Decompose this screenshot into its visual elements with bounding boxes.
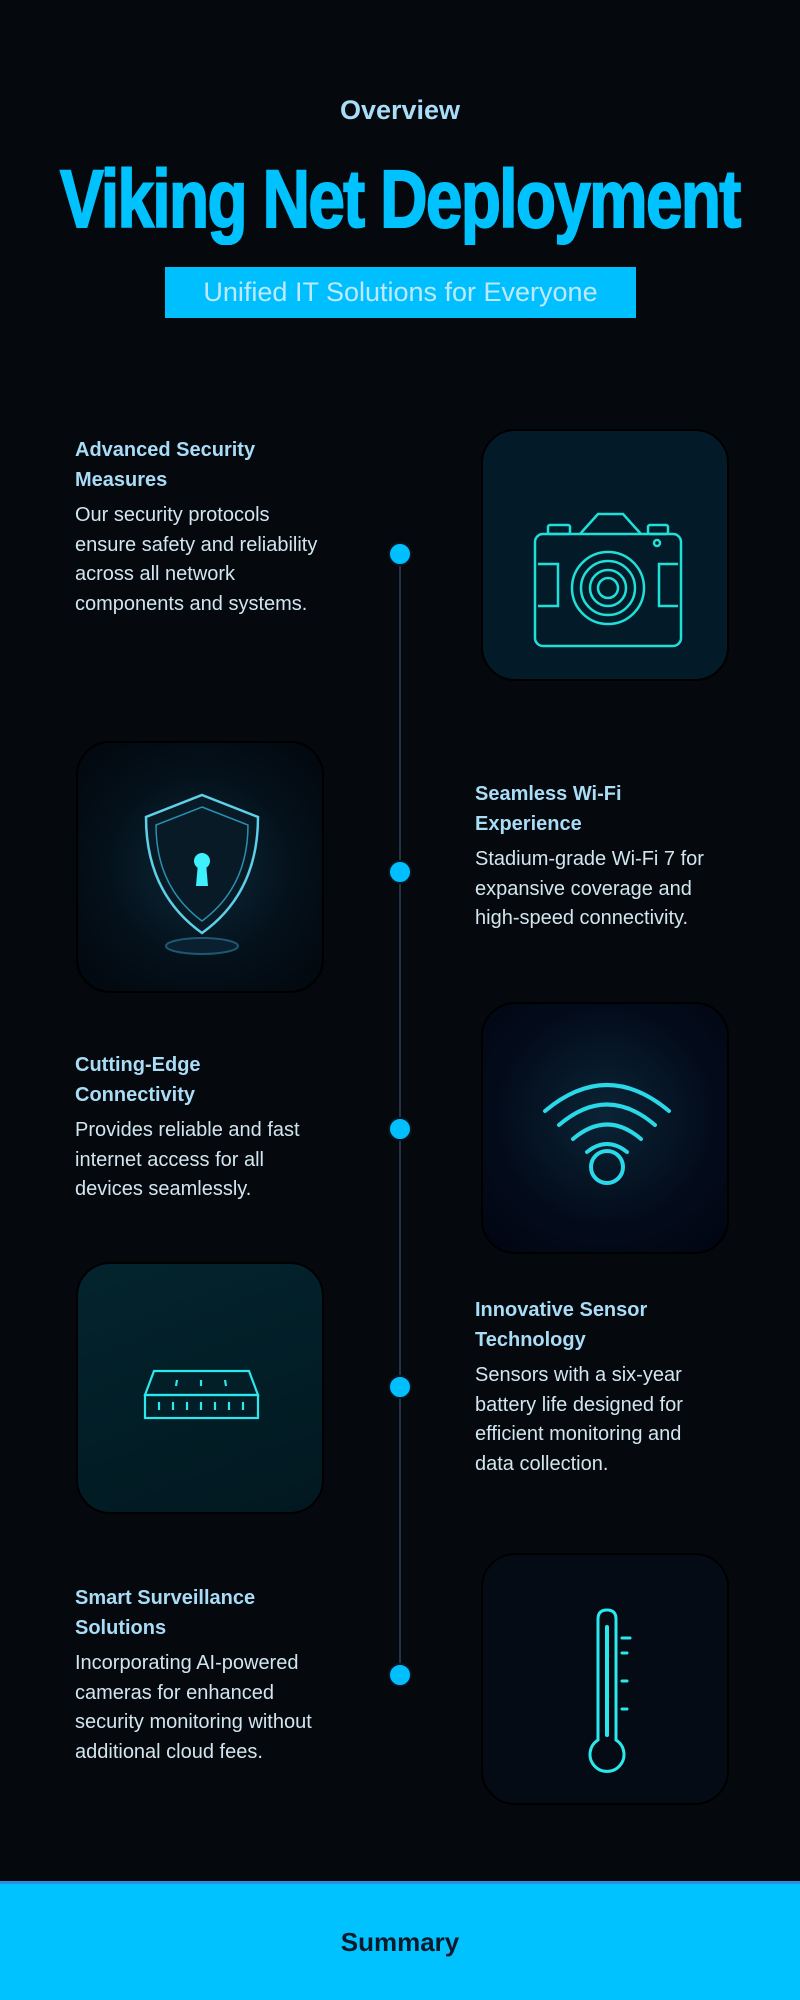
item 3 text: Cutting-Edge Connectivity: internet access for all (75, 1148, 264, 1170)
card: wifi icon (481, 1002, 729, 1254)
item 5 text: Smart Surveillance Solutions: Smart Surveillance (75, 1587, 255, 1609)
item 1 text: Advanced Security Measures: across all network (75, 563, 235, 585)
item 2 text: Seamless Wi-Fi Experience: expansive coverage and (475, 878, 692, 900)
footer summary bar (0, 1881, 800, 2000)
item 4 text: Innovative Sensor Technology: Sensors with a six-year (475, 1364, 682, 1386)
item 3 text: Cutting-Edge Connectivity: devices seamlessly. (75, 1178, 251, 1200)
item 2 text: Seamless Wi-Fi Experience: Seamless Wi-Fi (475, 783, 622, 805)
item 2 text: Seamless Wi-Fi Experience: Stadium-grade Wi-Fi 7 for (475, 848, 704, 870)
item 2 text: Seamless Wi-Fi Experience: high-speed connectivity. (475, 907, 688, 929)
item 4 text: Innovative Sensor Technology: Technology (475, 1329, 586, 1351)
title: Viking Net Deployment (60, 154, 740, 245)
item 5 text: Smart Surveillance Solutions: Solutions (75, 1617, 166, 1639)
item 5 text: Smart Surveillance Solutions: Incorporating AI-powered (75, 1652, 298, 1674)
item 4 text: Innovative Sensor Technology: data collection. (475, 1452, 608, 1474)
item 3 text: Cutting-Edge Connectivity (75, 1054, 300, 1200)
timeline line (399, 554, 401, 1675)
item 4 text: Innovative Sensor Technology: Innovative Sensor (475, 1299, 647, 1321)
card: thermometer icon (481, 1553, 729, 1805)
overview label: Overview (340, 95, 460, 125)
item 3 text: Cutting-Edge Connectivity: Provides reliable and fast (75, 1119, 300, 1141)
subtitle banner: Unified IT Solutions for Everyone (203, 277, 598, 307)
item 4 text: Innovative Sensor Technology: efficient monitoring and (475, 1423, 681, 1445)
card: shield lock icon (76, 741, 324, 993)
item 5 text: Smart Surveillance Solutions: additional cloud fees. (75, 1740, 263, 1762)
footer summary bar: Summary (341, 1927, 459, 1957)
item 1 text: Advanced Security Measures: components and systems. (75, 592, 307, 614)
item 4 text: Innovative Sensor Technology: battery life designed for (475, 1394, 683, 1416)
item 5 text: Smart Surveillance Solutions: cameras for enhanced (75, 1682, 274, 1704)
item 1 text: Advanced Security Measures (75, 439, 318, 614)
card: network switch icon (76, 1262, 324, 1514)
item 5 text: Smart Surveillance Solutions: security monitoring without (75, 1711, 312, 1733)
card: camera icon (481, 429, 729, 681)
item 4 text: Innovative Sensor Technology (475, 1299, 683, 1474)
item 2 text: Seamless Wi-Fi Experience: Experience (475, 813, 582, 835)
item 3 text: Cutting-Edge Connectivity: Cutting-Edge (75, 1054, 201, 1076)
subtitle banner (165, 267, 636, 318)
item 2 text: Seamless Wi-Fi Experience (475, 783, 704, 929)
item 1 text: Advanced Security Measures: ensure safety and reliability (75, 534, 317, 556)
item 1 text: Advanced Security Measures: Our security protocols (75, 504, 270, 526)
item 3 text: Cutting-Edge Connectivity: Connectivity (75, 1084, 195, 1106)
item 1 text: Advanced Security Measures: Advanced Security (75, 439, 255, 461)
item 1 text: Advanced Security Measures: Measures (75, 469, 167, 491)
item 5 text: Smart Surveillance Solutions (75, 1587, 312, 1762)
